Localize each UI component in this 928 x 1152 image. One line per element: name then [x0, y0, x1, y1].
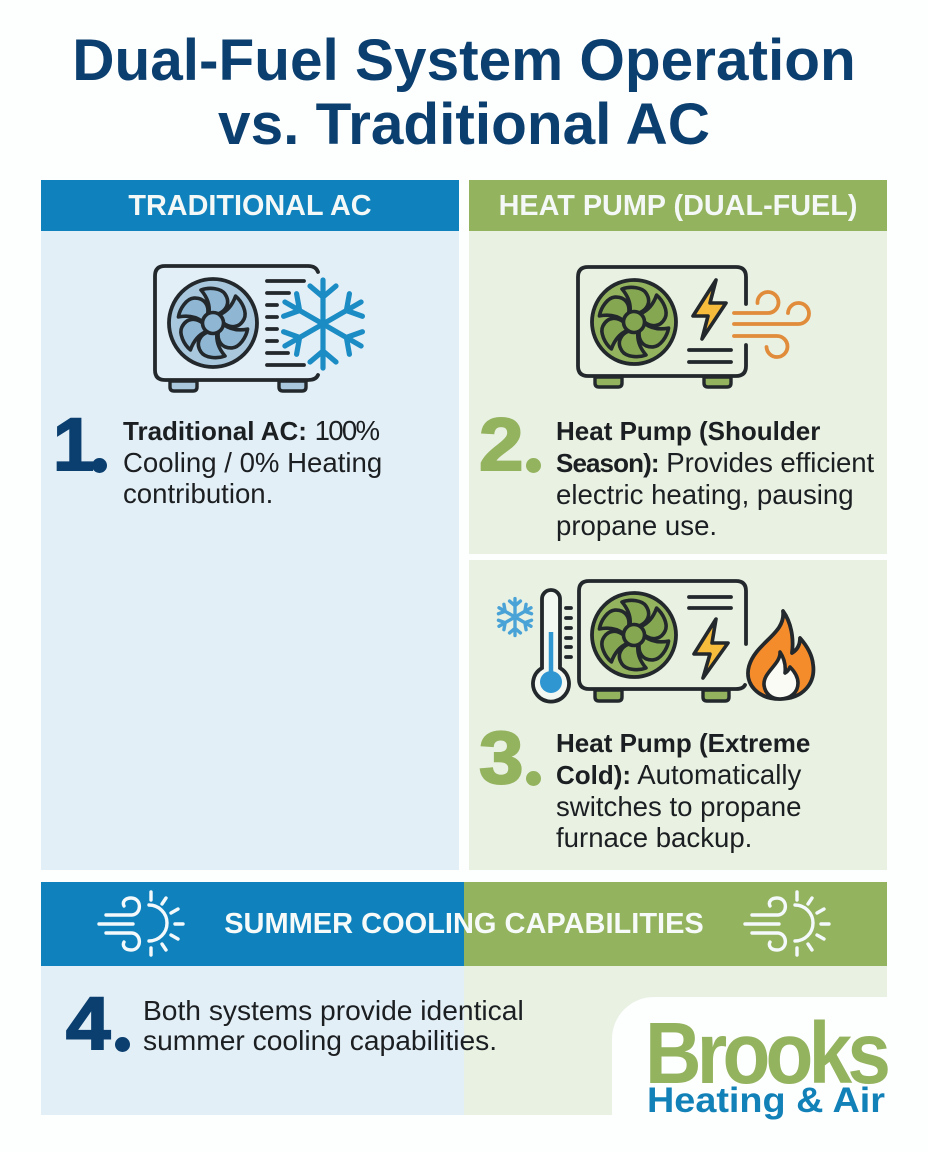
text: heat pump shoulder season — [556, 416, 874, 541]
text: heat pump extreme cold: switches to propane — [556, 791, 801, 822]
text: heat pump shoulder season: propane use. — [556, 510, 717, 541]
icon: AC unit with snowflake — [153, 264, 365, 393]
heading: heat pump dual-fuel: HEAT PUMP (DUAL-FUEL) — [499, 190, 857, 222]
panel: heat pump shoulder season — [469, 180, 887, 554]
text: heat pump extreme cold — [556, 728, 810, 853]
panel: shared summer cooling statement — [41, 966, 887, 1115]
number 3: 3 — [479, 716, 523, 799]
icon: heat pump with lightning and wind — [576, 265, 811, 389]
text: summer cooling statement — [143, 994, 524, 1056]
text: heat pump shoulder season: electric heating, pausing — [556, 479, 854, 510]
icon: wind and sun right — [743, 890, 831, 957]
panel: heat pump extreme cold — [469, 560, 887, 870]
number 1: 1 — [53, 403, 94, 486]
text: traditional AC: Traditional AC: 100% — [123, 415, 378, 446]
panel: summer cooling band — [41, 882, 887, 966]
text: traditional AC: contribution. — [123, 478, 273, 509]
icon: wind and sun left — [97, 890, 185, 957]
heading: summer cooling capabilities: SUMMER COOLING CAPABILITIES — [224, 908, 704, 940]
text: traditional AC: Cooling / 0% Heating — [123, 447, 382, 478]
title: Dual-Fuel System Operation — [72, 28, 856, 93]
title: vs. Traditional AC — [218, 92, 710, 157]
text: heat pump shoulder season: Heat Pump (Shoulder — [556, 416, 820, 446]
logo — [612, 997, 888, 1116]
text: heat pump extreme cold: Cold): Automatically — [556, 759, 801, 790]
heading: traditional AC: TRADITIONAL AC — [128, 190, 372, 222]
logo tagline: Heating & Air: Heating & Air — [647, 1081, 885, 1120]
text: heat pump shoulder season: Season): Provides efficient — [556, 447, 874, 478]
text: heat pump extreme cold: Heat Pump (Extreme — [556, 728, 810, 758]
heading: heat pump dual-fuel — [469, 180, 887, 231]
number 2: 2 — [479, 403, 523, 486]
panel: traditional AC — [41, 180, 459, 870]
number 4: 4 — [66, 982, 110, 1065]
text: summer cooling statement: Both systems provide identical — [143, 994, 524, 1026]
text: heat pump extreme cold: furnace backup. — [556, 822, 752, 853]
heading: traditional AC — [41, 180, 459, 231]
number 4 — [66, 982, 130, 1065]
icon: heat pump with thermometer and flame — [496, 579, 816, 704]
text: summer cooling statement: summer cooling capabilities. — [143, 1024, 497, 1056]
logo wordmark: Brooks: Brooks — [645, 1005, 886, 1102]
text: traditional AC — [123, 415, 382, 509]
title — [72, 28, 856, 157]
